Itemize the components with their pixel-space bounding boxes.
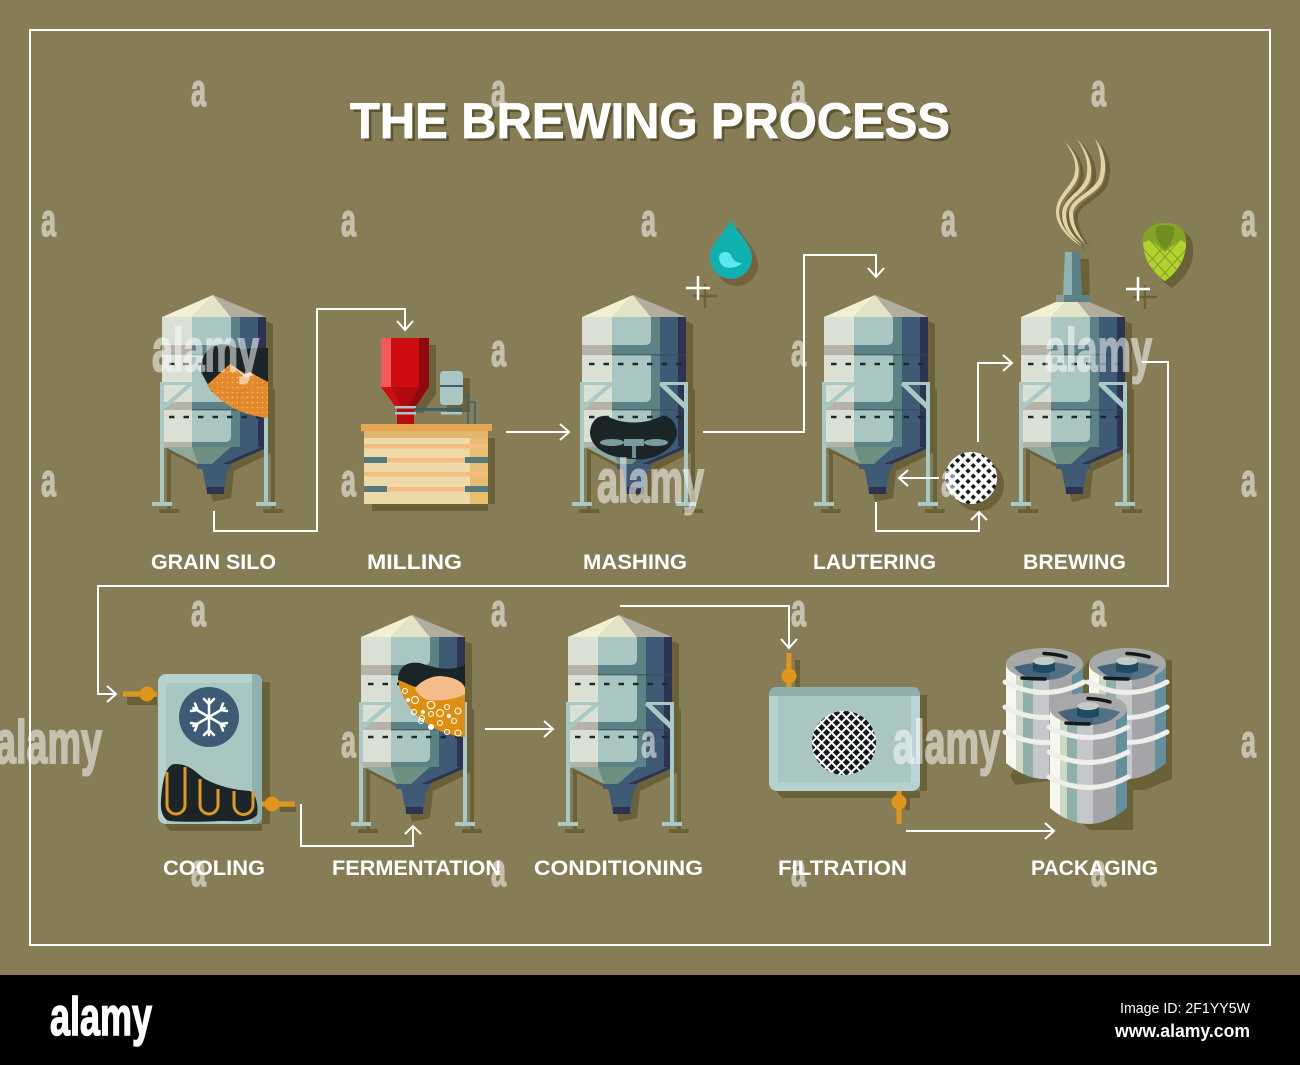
watermarks: a xyxy=(341,715,356,767)
step: grain silo xyxy=(152,295,283,513)
arrows xyxy=(98,255,1168,846)
watermarks: a xyxy=(341,194,356,246)
motor xyxy=(414,371,475,424)
step: brewing xyxy=(1011,139,1142,513)
watermarks: a xyxy=(491,64,506,116)
cooler cabinet xyxy=(158,674,262,824)
outlet pipe xyxy=(262,796,295,812)
watermarks: a xyxy=(1241,194,1256,246)
labels: MILLING xyxy=(367,551,462,574)
step: packaging kegs xyxy=(1005,648,1172,833)
watermarks: a xyxy=(641,194,656,246)
cutaway: fermenting beer xyxy=(398,663,465,737)
hopper xyxy=(381,338,429,424)
watermarks: a xyxy=(491,584,506,636)
plus sign: water xyxy=(686,276,717,308)
bottom pipe xyxy=(892,791,906,824)
arrow: brewing to cooling xyxy=(98,362,1168,702)
watermarks: alamy xyxy=(1045,317,1152,384)
filter mesh xyxy=(812,711,876,775)
icon: snowflake xyxy=(179,687,239,747)
labels: MASHING xyxy=(583,551,687,574)
watermarks: a xyxy=(1091,844,1106,896)
watermarks: a xyxy=(791,584,806,636)
icon: hop cone xyxy=(1140,223,1193,288)
arrow: milling to mashing xyxy=(506,424,569,440)
cutaway: paddle mixer xyxy=(590,416,677,459)
footer url: www.alamy.com xyxy=(1114,1021,1250,1041)
watermarks: a xyxy=(491,844,506,896)
arrow: fermentation to conditioning xyxy=(485,721,553,737)
step: milling xyxy=(361,338,495,511)
watermarks: a xyxy=(191,584,206,636)
arrow: filtration to packaging xyxy=(906,823,1054,839)
chimney xyxy=(1056,252,1090,302)
keg front xyxy=(1049,693,1128,833)
watermarks: a xyxy=(341,454,356,506)
filter housing xyxy=(769,687,920,791)
watermarks: a xyxy=(1241,454,1256,506)
labels xyxy=(151,551,1158,880)
step: filtration xyxy=(769,653,927,824)
watermarks: a xyxy=(641,715,656,767)
watermarks: a xyxy=(791,844,806,896)
cooling coil xyxy=(161,764,257,822)
footer image id: Image ID: 2F1YY5W xyxy=(1120,1000,1251,1017)
arrow: cooling to fermentation xyxy=(301,804,421,846)
cooling shadow xyxy=(127,682,296,831)
watermarks xyxy=(0,64,1256,896)
footer bar xyxy=(0,975,1300,1065)
keg shadows xyxy=(1010,660,1172,830)
plus sign: hops xyxy=(1126,277,1157,309)
keg back left xyxy=(1005,648,1084,788)
watermarks: a xyxy=(941,454,956,506)
labels: CONDITIONING xyxy=(534,857,703,880)
watermarks: a xyxy=(191,844,206,896)
arrow: filter to brewing xyxy=(978,355,1012,442)
wooden table xyxy=(361,424,492,504)
mill shadows xyxy=(372,345,495,511)
watermarks: a xyxy=(791,64,806,116)
step: mashing xyxy=(572,295,703,513)
watermarks: alamy xyxy=(0,709,102,776)
watermarks: alamy xyxy=(597,448,704,515)
arrow: lautering to filter xyxy=(876,502,987,531)
watermarks: a xyxy=(191,64,206,116)
filter shadow xyxy=(776,660,927,810)
labels: PACKAGING xyxy=(1031,857,1158,880)
footer logo: alamy xyxy=(50,987,152,1047)
cutaway: grain xyxy=(201,344,268,418)
watermarks: a xyxy=(1241,715,1256,767)
steam xyxy=(1056,139,1110,251)
labels: FILTRATION xyxy=(778,857,907,880)
step: conditioning xyxy=(558,615,689,833)
watermarks: alamy xyxy=(893,709,1000,776)
step: fermentation xyxy=(351,615,482,833)
icon: water drop xyxy=(710,220,758,286)
watermarks: a xyxy=(941,194,956,246)
labels: FERMENTATION xyxy=(332,857,501,880)
watermarks: a xyxy=(1091,64,1106,116)
watermarks: alamy xyxy=(152,317,259,384)
step: cooling xyxy=(123,674,296,831)
labels: COOLING xyxy=(163,857,265,880)
watermarks: a xyxy=(41,194,56,246)
watermarks: a xyxy=(791,324,806,376)
labels: LAUTERING xyxy=(813,551,936,574)
watermarks: a xyxy=(491,324,506,376)
watermarks: a xyxy=(41,454,56,506)
title: THE BREWING PROCESS xyxy=(350,93,950,149)
arrow: silo to milling xyxy=(214,309,413,531)
labels: GRAIN SILO xyxy=(151,551,276,574)
inlet pipe xyxy=(123,686,157,702)
arrow: conditioning to filtration xyxy=(620,606,797,648)
icon: hop filter disc xyxy=(945,452,1004,511)
labels: BREWING xyxy=(1023,551,1126,574)
arrow: mashing to lautering xyxy=(703,255,884,432)
arrow: filter to lautering xyxy=(899,470,939,486)
title: THE BREWING PROCESS xyxy=(353,96,953,152)
step: lautering xyxy=(814,295,945,513)
top pipe xyxy=(782,653,796,687)
watermarks: a xyxy=(1091,584,1106,636)
keg back right xyxy=(1088,648,1167,788)
